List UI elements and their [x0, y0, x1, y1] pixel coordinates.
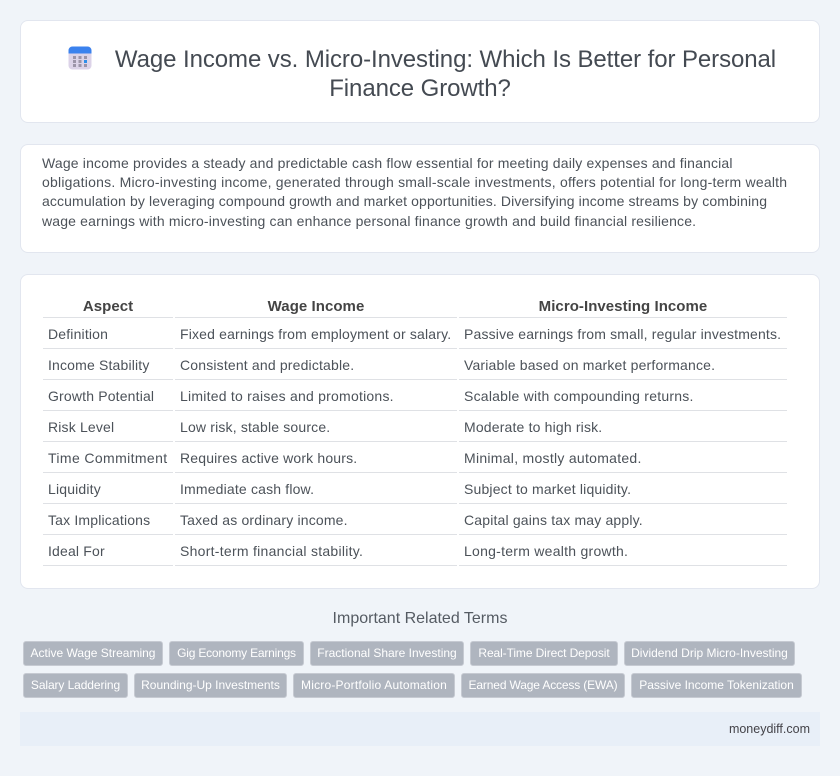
comparison table: Aspect	[83, 298, 133, 315]
panel: comparison table	[20, 274, 820, 589]
tags: related terms: Rounding-Up Investments	[141, 678, 280, 692]
heading: related terms: Important Related Terms	[333, 610, 507, 627]
title	[115, 46, 776, 102]
icon: calendar	[68, 46, 92, 70]
tags: related terms: Active Wage Streaming	[31, 646, 155, 660]
title: Wage Income vs. Micro-Investing: Which Is Better for Personal	[115, 46, 776, 73]
tags: related terms: Micro-Portfolio Automation	[301, 678, 447, 692]
tags: related terms: Dividend Drip Micro-Investing	[631, 646, 788, 660]
tags: related terms: Gig Economy Earnings	[177, 646, 296, 660]
comparison table: Income Stability	[48, 357, 150, 373]
tags: related terms	[23, 641, 802, 698]
comparison table: Passive earnings from small, regular investments.	[464, 326, 781, 342]
comparison table: Capital gains tax may apply.	[464, 512, 643, 528]
comparison table: Limited to raises and promotions.	[180, 388, 394, 404]
intro text: obligations. Micro-investing income, generated through small-scale investments, offers potential for long-term wealth	[42, 174, 787, 190]
comparison table: Growth Potential	[48, 388, 154, 404]
comparison table: Immediate cash flow.	[180, 481, 314, 497]
comparison table: Ideal For	[48, 543, 105, 559]
comparison table: Definition	[48, 326, 108, 342]
tags: related terms: Salary Laddering	[31, 678, 120, 692]
comparison table: Consistent and predictable.	[180, 357, 354, 373]
comparison table: Tax Implications	[48, 512, 150, 528]
comparison table: Wage Income	[268, 298, 364, 315]
comparison table: Scalable with compounding returns.	[464, 388, 694, 404]
comparison table: Moderate to high risk.	[464, 419, 602, 435]
comparison table: Short-term financial stability.	[180, 543, 363, 559]
title: Finance Growth?	[329, 75, 511, 102]
intro text	[42, 155, 787, 229]
comparison table: Taxed as ordinary income.	[180, 512, 348, 528]
comparison table: Low risk, stable source.	[180, 419, 330, 435]
comparison table: Liquidity	[48, 481, 101, 497]
comparison table: Long-term wealth growth.	[464, 543, 628, 559]
comparison table: Micro-Investing Income	[539, 298, 707, 315]
comparison table: Time Commitment	[48, 450, 168, 466]
tags: related terms: Fractional Share Investing	[317, 646, 457, 660]
comparison table: Minimal, mostly automated.	[464, 450, 642, 466]
intro text: accumulation by leveraging compound growth and market opportunities. Diversifying income streams by combining	[42, 193, 767, 209]
tags: related terms: Real-Time Direct Deposit	[478, 646, 610, 660]
comparison table: Requires active work hours.	[180, 450, 357, 466]
comparison table: Fixed earnings from employment or salary.	[180, 326, 451, 342]
tags: related terms: Earned Wage Access (EWA)	[469, 678, 617, 692]
intro text: wage earnings with micro-investing can enhance personal finance growth and build financial resilience.	[42, 213, 696, 229]
comparison table: Subject to market liquidity.	[464, 481, 631, 497]
tags: related terms: Passive Income Tokenization	[639, 678, 794, 692]
comparison table: Variable based on market performance.	[464, 357, 715, 373]
panel: introduction	[20, 144, 820, 253]
footer bar	[20, 712, 820, 746]
comparison table	[43, 298, 787, 566]
intro text: Wage income provides a steady and predictable cash flow essential for meeting daily expenses and financial	[42, 155, 733, 171]
comparison table: Risk Level	[48, 419, 114, 435]
footer source: moneydiff.com	[729, 722, 810, 736]
header panel	[20, 20, 820, 123]
